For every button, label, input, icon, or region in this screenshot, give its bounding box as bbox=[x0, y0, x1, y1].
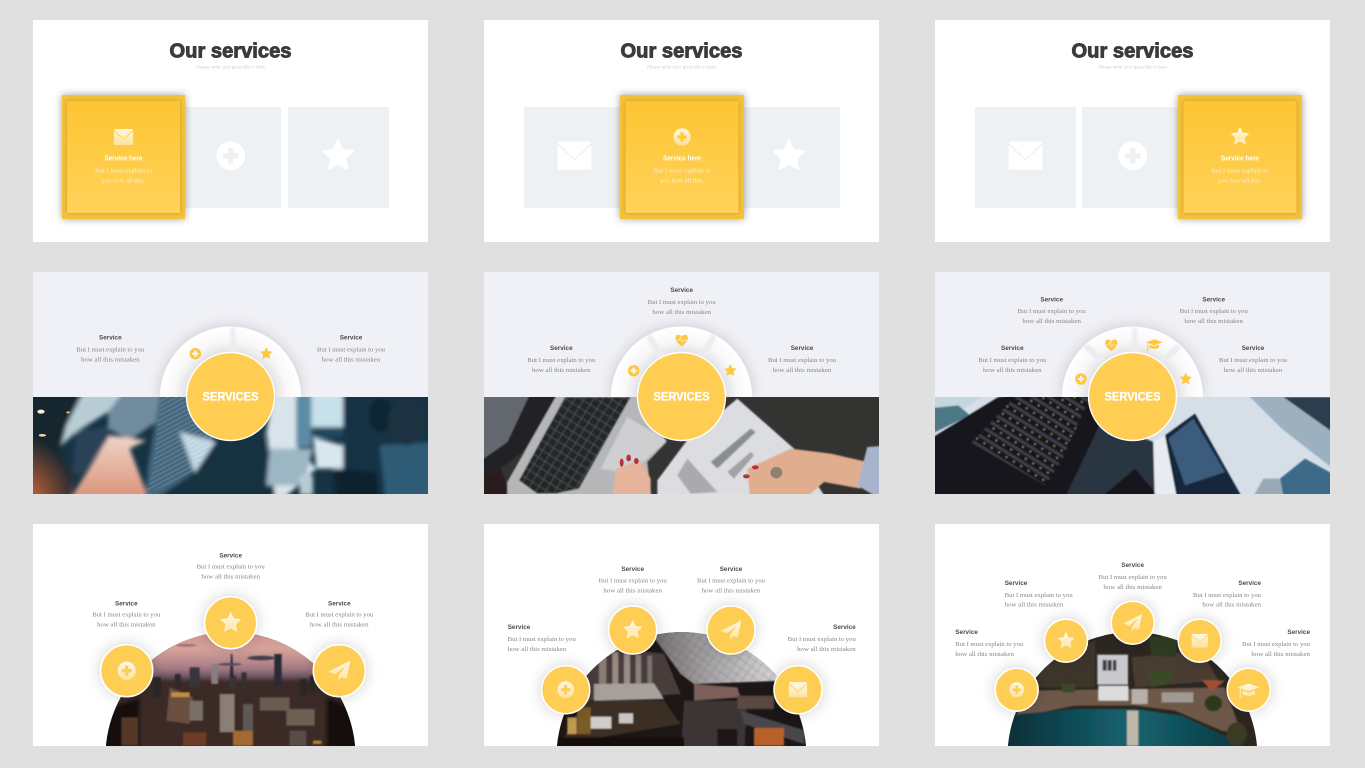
card: active envelope: But I must explain to bbox=[95, 168, 153, 174]
text: top service: how all this mistaken bbox=[201, 574, 261, 581]
hub circle: SERVICES bbox=[654, 390, 710, 404]
photo: aerial view of seaside bbox=[1008, 634, 1257, 746]
text: right service: Service bbox=[833, 624, 856, 631]
text: top service: how all this mistaken bbox=[1103, 584, 1163, 591]
text: left service: But I must explain to you bbox=[955, 641, 1024, 648]
service node: star bbox=[609, 606, 657, 654]
text: top service: Service bbox=[670, 287, 693, 294]
text: right service: Service bbox=[1242, 345, 1265, 352]
hub circle bbox=[186, 352, 274, 440]
card: active envelope bbox=[62, 95, 185, 219]
text: upper left service: But I must explain to you bbox=[1005, 592, 1073, 599]
panel: arc with four services bbox=[484, 524, 879, 757]
text: upper left service: Service bbox=[621, 566, 644, 573]
text: left service: Service bbox=[508, 624, 531, 631]
text: left service: how all this mistaken bbox=[97, 622, 156, 629]
photo: skyscrapers bbox=[935, 397, 1330, 494]
service node: star bbox=[1044, 619, 1088, 662]
icon: plus bbox=[190, 348, 201, 359]
wheel bbox=[611, 326, 752, 397]
subtitle: Please write your great title in here bbox=[1098, 64, 1167, 70]
text: upper right service: But I must explain to you bbox=[1193, 592, 1262, 599]
text: left service: But I must explain to you bbox=[508, 636, 576, 643]
text: right service: Service bbox=[328, 600, 351, 608]
wheel bbox=[160, 326, 301, 397]
text: upper left service bbox=[1005, 580, 1073, 608]
text: right service: But I must explain to you bbox=[317, 346, 386, 353]
card: plus bbox=[1082, 107, 1183, 208]
subtitle: Please write your great title in here bbox=[647, 64, 716, 70]
hub circle: SERVICES bbox=[202, 390, 258, 404]
card: active plus: Service here bbox=[663, 156, 701, 162]
card: active plus: But I must explain to bbox=[654, 168, 711, 174]
text: left service: Service bbox=[99, 334, 122, 342]
text: right service: how all this mistaken bbox=[1251, 651, 1311, 658]
card: star bbox=[288, 107, 389, 208]
text: right service: But I must explain to you bbox=[1219, 357, 1288, 364]
icon: graduation cap bbox=[1146, 339, 1163, 351]
text: left service: how all this mistaken bbox=[983, 367, 1042, 374]
text: left service: how all this mistaken bbox=[532, 367, 591, 374]
text: right service: Service bbox=[1287, 629, 1310, 636]
text: upper right service: Service bbox=[1202, 296, 1225, 303]
icon: heart bbox=[675, 335, 688, 346]
text: upper right service: Service bbox=[720, 566, 743, 573]
hub circle bbox=[1088, 352, 1176, 440]
card: plus bbox=[181, 107, 281, 208]
panel: services cards, third active bbox=[935, 20, 1330, 242]
panel: arc with five services bbox=[935, 524, 1330, 757]
text: upper left service bbox=[1018, 296, 1086, 325]
card: envelope bbox=[975, 107, 1076, 208]
panel: wheel with four services bbox=[925, 272, 1342, 505]
text: right service: how all this mistaken bbox=[797, 646, 856, 653]
panel: wheel with two services bbox=[23, 272, 440, 505]
text: right service: how all this mistaken bbox=[322, 356, 381, 363]
text: right service: But I must explain to you bbox=[788, 636, 856, 643]
card: active envelope: you how all this. bbox=[102, 178, 146, 184]
panel: wheel with three services bbox=[474, 272, 891, 505]
card: active star bbox=[1178, 95, 1302, 219]
text: upper right service bbox=[1193, 580, 1262, 608]
text: upper right service: how all this mistaken bbox=[1202, 602, 1262, 608]
panel: services cards, second active bbox=[484, 20, 879, 242]
service node: paper plane bbox=[707, 606, 755, 654]
text: right service bbox=[1219, 345, 1288, 374]
text: right service: But I must explain to you bbox=[768, 357, 837, 364]
text: top service: But I must explain to you bbox=[648, 299, 716, 306]
text: right service: how all this mistaken bbox=[773, 367, 832, 374]
card: active star: But I must explain to bbox=[1212, 168, 1269, 174]
icon: star bbox=[1180, 373, 1191, 384]
text: right service: Service bbox=[791, 345, 814, 352]
text: right service: But I must explain to you bbox=[1242, 641, 1311, 648]
hub circle bbox=[638, 352, 726, 440]
photo: city skyline at dusk bbox=[106, 634, 355, 746]
text: left service bbox=[508, 624, 576, 653]
text: right service bbox=[768, 345, 837, 374]
text: upper left service: how all this mistaken bbox=[603, 588, 663, 595]
text: top service: But I must explain to you bbox=[197, 564, 265, 571]
text: upper left service: But I must explain to you bbox=[599, 578, 667, 585]
text: upper right service: Service bbox=[1238, 580, 1261, 587]
text: left service bbox=[527, 345, 596, 374]
text: upper right service: But I must explain to you bbox=[1180, 308, 1248, 315]
text: upper right service: how all this mistaken bbox=[1184, 318, 1244, 325]
text: upper left service: how all this mistaken bbox=[1022, 318, 1082, 325]
text: left service: Service bbox=[955, 629, 978, 636]
service node: envelope bbox=[1178, 619, 1221, 662]
text: upper left service: Service bbox=[1040, 296, 1063, 303]
text: top service bbox=[197, 552, 265, 581]
icon: star bbox=[261, 348, 272, 358]
text: right service bbox=[1242, 629, 1311, 658]
text: right service bbox=[305, 600, 374, 629]
service node: plus bbox=[542, 666, 590, 714]
card: active plus: you how all this. bbox=[660, 178, 704, 184]
text: left service: But I must explain to you bbox=[527, 357, 596, 364]
text: top service: Service bbox=[1121, 562, 1144, 569]
service node: plus bbox=[101, 645, 153, 697]
service node: graduation cap bbox=[1227, 668, 1270, 711]
subtitle: Please write your great title in here bbox=[196, 64, 265, 70]
photo: laptop and notes on desk bbox=[484, 397, 879, 494]
title: Our services bbox=[620, 40, 742, 62]
text: upper left service: But I must explain to you bbox=[1018, 308, 1086, 315]
wheel bbox=[1062, 326, 1203, 397]
icon: plus bbox=[628, 365, 639, 376]
card: active star: Service here bbox=[1221, 156, 1259, 162]
text: right service: Service bbox=[340, 334, 363, 342]
text: upper right service bbox=[1180, 296, 1248, 325]
text: right service: how all this mistaken bbox=[1224, 367, 1283, 374]
text: left service: Service bbox=[550, 345, 573, 352]
text: upper right service bbox=[697, 566, 766, 595]
service node: paper plane bbox=[1111, 601, 1154, 644]
text: top service bbox=[648, 287, 716, 316]
text: left service: how all this mistaken bbox=[508, 646, 567, 653]
card: star bbox=[739, 107, 840, 208]
text: left service: how all this mistaken bbox=[955, 651, 1015, 658]
text: left service: But I must explain to you bbox=[76, 346, 145, 353]
text: top service bbox=[1099, 562, 1167, 591]
text: left service: Service bbox=[1001, 345, 1024, 352]
card: active envelope: Service here bbox=[104, 156, 143, 162]
photo: business people and towers bbox=[33, 397, 428, 494]
icon: heart bbox=[1105, 340, 1118, 351]
text: right service bbox=[788, 624, 856, 653]
panel: arc with three services bbox=[33, 524, 428, 759]
title: Our services bbox=[1072, 40, 1194, 62]
card: active star: you how all this. bbox=[1218, 178, 1262, 184]
text: top service: how all this mistaken bbox=[652, 309, 712, 316]
text: right service: But I must explain to you bbox=[305, 612, 374, 619]
service node: plus bbox=[995, 668, 1038, 711]
text: upper right service: how all this mistaken bbox=[702, 588, 761, 595]
panel: services cards, first active bbox=[33, 20, 428, 242]
icon: star bbox=[725, 365, 736, 375]
text: left service bbox=[92, 600, 161, 629]
text: upper right service: But I must explain to you bbox=[697, 578, 766, 585]
card: active plus bbox=[620, 95, 744, 219]
text: top service: Service bbox=[219, 552, 242, 560]
title: Our services bbox=[170, 40, 292, 62]
icon: plus bbox=[1075, 373, 1087, 385]
photo: train station hall bbox=[557, 632, 806, 746]
text: right service: how all this mistaken bbox=[310, 622, 369, 629]
text: left service: Service bbox=[115, 600, 138, 608]
text: left service bbox=[978, 345, 1047, 374]
text: left service bbox=[955, 629, 1024, 658]
hub circle: SERVICES bbox=[1104, 390, 1160, 404]
service node: star bbox=[205, 597, 257, 649]
text: upper left service bbox=[599, 566, 667, 595]
text: upper left service: how all this mistaken bbox=[1005, 602, 1064, 608]
service node: envelope bbox=[774, 666, 822, 714]
service node: paper plane bbox=[313, 645, 365, 697]
text: left service: But I must explain to you bbox=[978, 357, 1047, 364]
text: upper left service: Service bbox=[1005, 580, 1028, 587]
text: left service: how all this mistaken bbox=[81, 356, 140, 363]
text: right service bbox=[317, 334, 386, 363]
text: top service: But I must explain to you bbox=[1099, 574, 1167, 581]
text: left service: But I must explain to you bbox=[92, 612, 161, 619]
card: envelope bbox=[524, 107, 625, 208]
text: left service bbox=[76, 334, 145, 363]
